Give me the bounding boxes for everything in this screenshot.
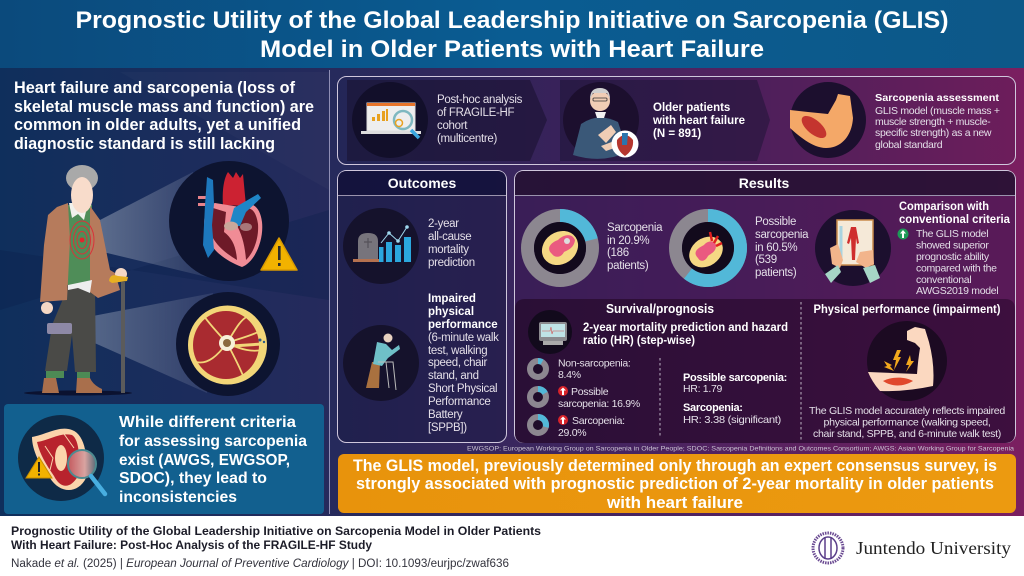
- text: patients: (N = 891): [653, 128, 701, 140]
- title banner: [0, 0, 1024, 68]
- text: study type: Post-hoc analysis: [437, 94, 523, 106]
- text: hazard ratios: [683, 372, 787, 426]
- text: study type: (multicentre): [437, 133, 497, 145]
- heading: physical performance: Physical performance (impairment): [814, 304, 1001, 316]
- text: mortality prediction heading: [583, 322, 788, 347]
- conclusion banner: The GLIS model, previously determined only through an expert consensus survey, is: [353, 457, 997, 475]
- text: possible sarcopenia prevalence: (539: [755, 254, 777, 266]
- icon: patient with walker: [343, 325, 419, 401]
- callout: differing criteria: While different criteria: [119, 414, 296, 431]
- text: physical performance outcome: physical: [428, 306, 474, 318]
- heading: outcomes: Outcomes: [388, 175, 456, 191]
- title banner: Prognostic Utility of the Global Leadership Initiative on Sarcopenia (GLIS): [76, 7, 948, 34]
- text: physical performance outcome: Short Physical: [428, 383, 497, 395]
- text: sarcopenia prevalence: patients): [607, 260, 649, 272]
- intro text: [14, 79, 314, 153]
- text: assessment: muscle strength + muscle-: [875, 116, 991, 128]
- intro text: diagnostic standard is still lacking: [14, 135, 275, 153]
- text: possible sarcopenia prevalence: in 60.5%: [755, 242, 797, 254]
- callout: differing criteria: for assessing sarcopenia: [119, 433, 307, 450]
- donut: possible sarcopenia 60.5%: [676, 216, 740, 280]
- text: comparison with conventional criteria: AWGS2019 model: [916, 285, 998, 297]
- text: comparison with conventional criteria: conventional criteria: [899, 214, 1011, 226]
- text: comparison with conventional criteria: prognostic ability: [916, 251, 990, 263]
- text: physical performance result: [809, 405, 1005, 440]
- text: comparison with conventional criteria: Comparison with: [899, 201, 989, 213]
- citation: [11, 526, 541, 570]
- heading: results: Results: [739, 175, 789, 191]
- icon: upper arm muscle: [790, 82, 866, 158]
- title banner: Model in Older Patients with Heart Failure: [260, 36, 764, 63]
- text: mortality outcome: prediction: [428, 257, 475, 269]
- logo: Juntendo University: Juntendo University: [856, 538, 1011, 558]
- text: sarcopenia prevalence: [607, 222, 663, 272]
- intro text: Heart failure and sarcopenia (loss of: [14, 79, 295, 97]
- text: physical performance outcome: speed, chair: [428, 357, 488, 369]
- icon: mortality chart: [343, 208, 419, 284]
- text: physical performance outcome: Battery: [428, 409, 463, 421]
- callout: differing criteria: exist (AWGS, EWGSOP,: [119, 452, 290, 469]
- conclusion banner: with heart failure: [606, 494, 743, 512]
- text: comparison with conventional criteria: conventional: [916, 274, 971, 286]
- donut: possible sarcopenia 16.9%: [530, 389, 546, 405]
- panel: results: [514, 170, 1016, 442]
- icon: clipboard body chart: [815, 210, 891, 286]
- callout: differing criteria: SDOC), they lead to: [119, 470, 267, 487]
- panel: study design: [338, 76, 1016, 164]
- text: non-sarcopenia rate: 8.4%: [558, 369, 581, 381]
- text: physical performance outcome: test, walking: [428, 345, 487, 357]
- text: mortality prediction heading: 2-year mortality prediction and hazard: [583, 322, 788, 334]
- text: assessment: [875, 92, 1000, 151]
- icon: older patient: [563, 82, 639, 159]
- text: physical performance outcome: [428, 293, 499, 434]
- text: physical performance result: physical performance (walking speed,: [824, 416, 990, 428]
- text: sarcopenia rate: [558, 415, 625, 439]
- text: hazard ratios: HR: 3.38 (significant): [683, 414, 781, 426]
- text: comparison with conventional criteria: showed superior: [916, 240, 989, 252]
- text: hazard ratios: HR: 1.79: [683, 383, 722, 395]
- intro text: skeletal muscle mass and function) are: [14, 98, 314, 116]
- text: study type: [437, 94, 523, 145]
- text: physical performance outcome: [SPPB]): [428, 422, 467, 434]
- text: physical performance outcome: stand, and: [428, 370, 479, 382]
- text: mortality outcome: 2-year: [428, 218, 459, 230]
- panel: survival and physical performance: [515, 299, 1015, 443]
- heading: survival/prognosis: Survival/prognosis: [606, 302, 714, 316]
- icon: flexed arm with pain: [867, 321, 947, 401]
- icon: laptop analysis: [352, 82, 428, 158]
- text: possible sarcopenia prevalence: [755, 216, 809, 279]
- text: sarcopenia rate: Sarcopenia:: [572, 415, 625, 427]
- text: possible sarcopenia prevalence: sarcopenia: [755, 229, 809, 241]
- donut: sarcopenia 29.0%: [530, 417, 546, 433]
- citation: Nakade et al. (2025) | European Journal of Preventive Cardiology | DOI: 10.1093/eurjpc/zwaf636: [11, 558, 509, 570]
- icon: muscle with magnifier and warning: [18, 415, 105, 501]
- text: comparison with conventional criteria: The GLIS model: [916, 228, 988, 240]
- text: study type: cohort: [437, 120, 468, 132]
- icon: heart monitor: [528, 310, 572, 354]
- text: non-sarcopenia rate: [558, 358, 631, 381]
- text: mortality outcome: [428, 218, 475, 269]
- text: hazard ratios: Sarcopenia:: [683, 402, 743, 414]
- citation: Prognostic Utility of the Global Leadership Initiative on Sarcopenia Model in Older Patients: [11, 526, 541, 538]
- text: possible sarcopenia prevalence: Possible: [755, 216, 796, 228]
- callout: differing criteria: inconsistencies: [119, 489, 237, 506]
- text: mortality outcome: mortality: [428, 244, 469, 256]
- text: assessment: GLIS model (muscle mass +: [875, 105, 1000, 117]
- text: physical performance outcome: Impaired: [428, 293, 476, 305]
- text: patients: with heart failure: [652, 115, 745, 127]
- text: non-sarcopenia rate: Non-sarcopenia:: [558, 358, 631, 370]
- text: physical performance result: The GLIS model accurately reflects impaired: [809, 405, 1005, 417]
- text: sarcopenia prevalence: (186: [607, 247, 629, 259]
- text: patients: Older patients: [653, 102, 730, 114]
- text: possible sarcopenia rate: [558, 386, 640, 410]
- text: physical performance result: chair stand, SPPB, and 6-minute walk test): [813, 428, 1001, 440]
- zoom beams: [72, 172, 213, 393]
- text: physical performance outcome: (6-minute walk: [428, 332, 499, 344]
- conclusion banner: strongly associated with prognostic prediction of 2-year mortality in older patients: [356, 475, 994, 493]
- text: assessment: Sarcopenia assessment: [875, 92, 1000, 104]
- text: assessment: global standard: [875, 139, 943, 151]
- text: sarcopenia rate: 29.0%: [558, 427, 586, 439]
- text: physical performance outcome: Performance: [428, 396, 491, 408]
- illustration: older man with cane: [24, 165, 132, 396]
- donut: sarcopenia 20.9%: [528, 216, 592, 280]
- text: possible sarcopenia prevalence: patients): [755, 267, 797, 279]
- abbreviations note: EWGSOP: European Working Group on Sarcopenia in Older People; SDOC: Sarcopenia Definitions and Outcomes Consortium; AWGS: Asian Working Group for Sarcopenia: [467, 446, 1014, 452]
- text: possible sarcopenia rate: Possible: [571, 386, 609, 398]
- text: patients: [652, 102, 745, 140]
- text: possible sarcopenia rate: sarcopenia: 16.9%: [558, 398, 640, 410]
- text: sarcopenia prevalence: Sarcopenia: [607, 222, 663, 234]
- icon: heart with warning: [169, 161, 297, 281]
- text: mortality outcome: all-cause: [428, 231, 471, 243]
- text: hazard ratios: Possible sarcopenia:: [683, 372, 787, 384]
- icon: green up arrow: [898, 228, 908, 240]
- intro text: common in older adults, yet a unified: [14, 116, 301, 134]
- icon: thigh muscle cross-section: [176, 292, 280, 396]
- logo: Juntendo University: [813, 533, 1011, 563]
- citation: With Heart Failure: Post-Hoc Analysis of the FRAGILE-HF Study: [11, 540, 373, 552]
- text: sarcopenia prevalence: in 20.9%: [607, 235, 649, 247]
- text: study type: of FRAGILE-HF: [437, 107, 515, 119]
- text: comparison with conventional criteria: compared with the: [916, 262, 997, 274]
- text: physical performance outcome: performance: [428, 319, 498, 331]
- callout: differing criteria: [4, 404, 324, 514]
- panel: outcomes: [338, 170, 506, 442]
- text: assessment: specific strength) as a new: [875, 127, 992, 139]
- text: comparison with conventional criteria: [898, 201, 1011, 297]
- text: mortality prediction heading: ratio (HR) (step-wise): [583, 335, 695, 347]
- donut: non-sarcopenia 8.4%: [530, 361, 546, 377]
- conclusion banner: [338, 454, 1016, 513]
